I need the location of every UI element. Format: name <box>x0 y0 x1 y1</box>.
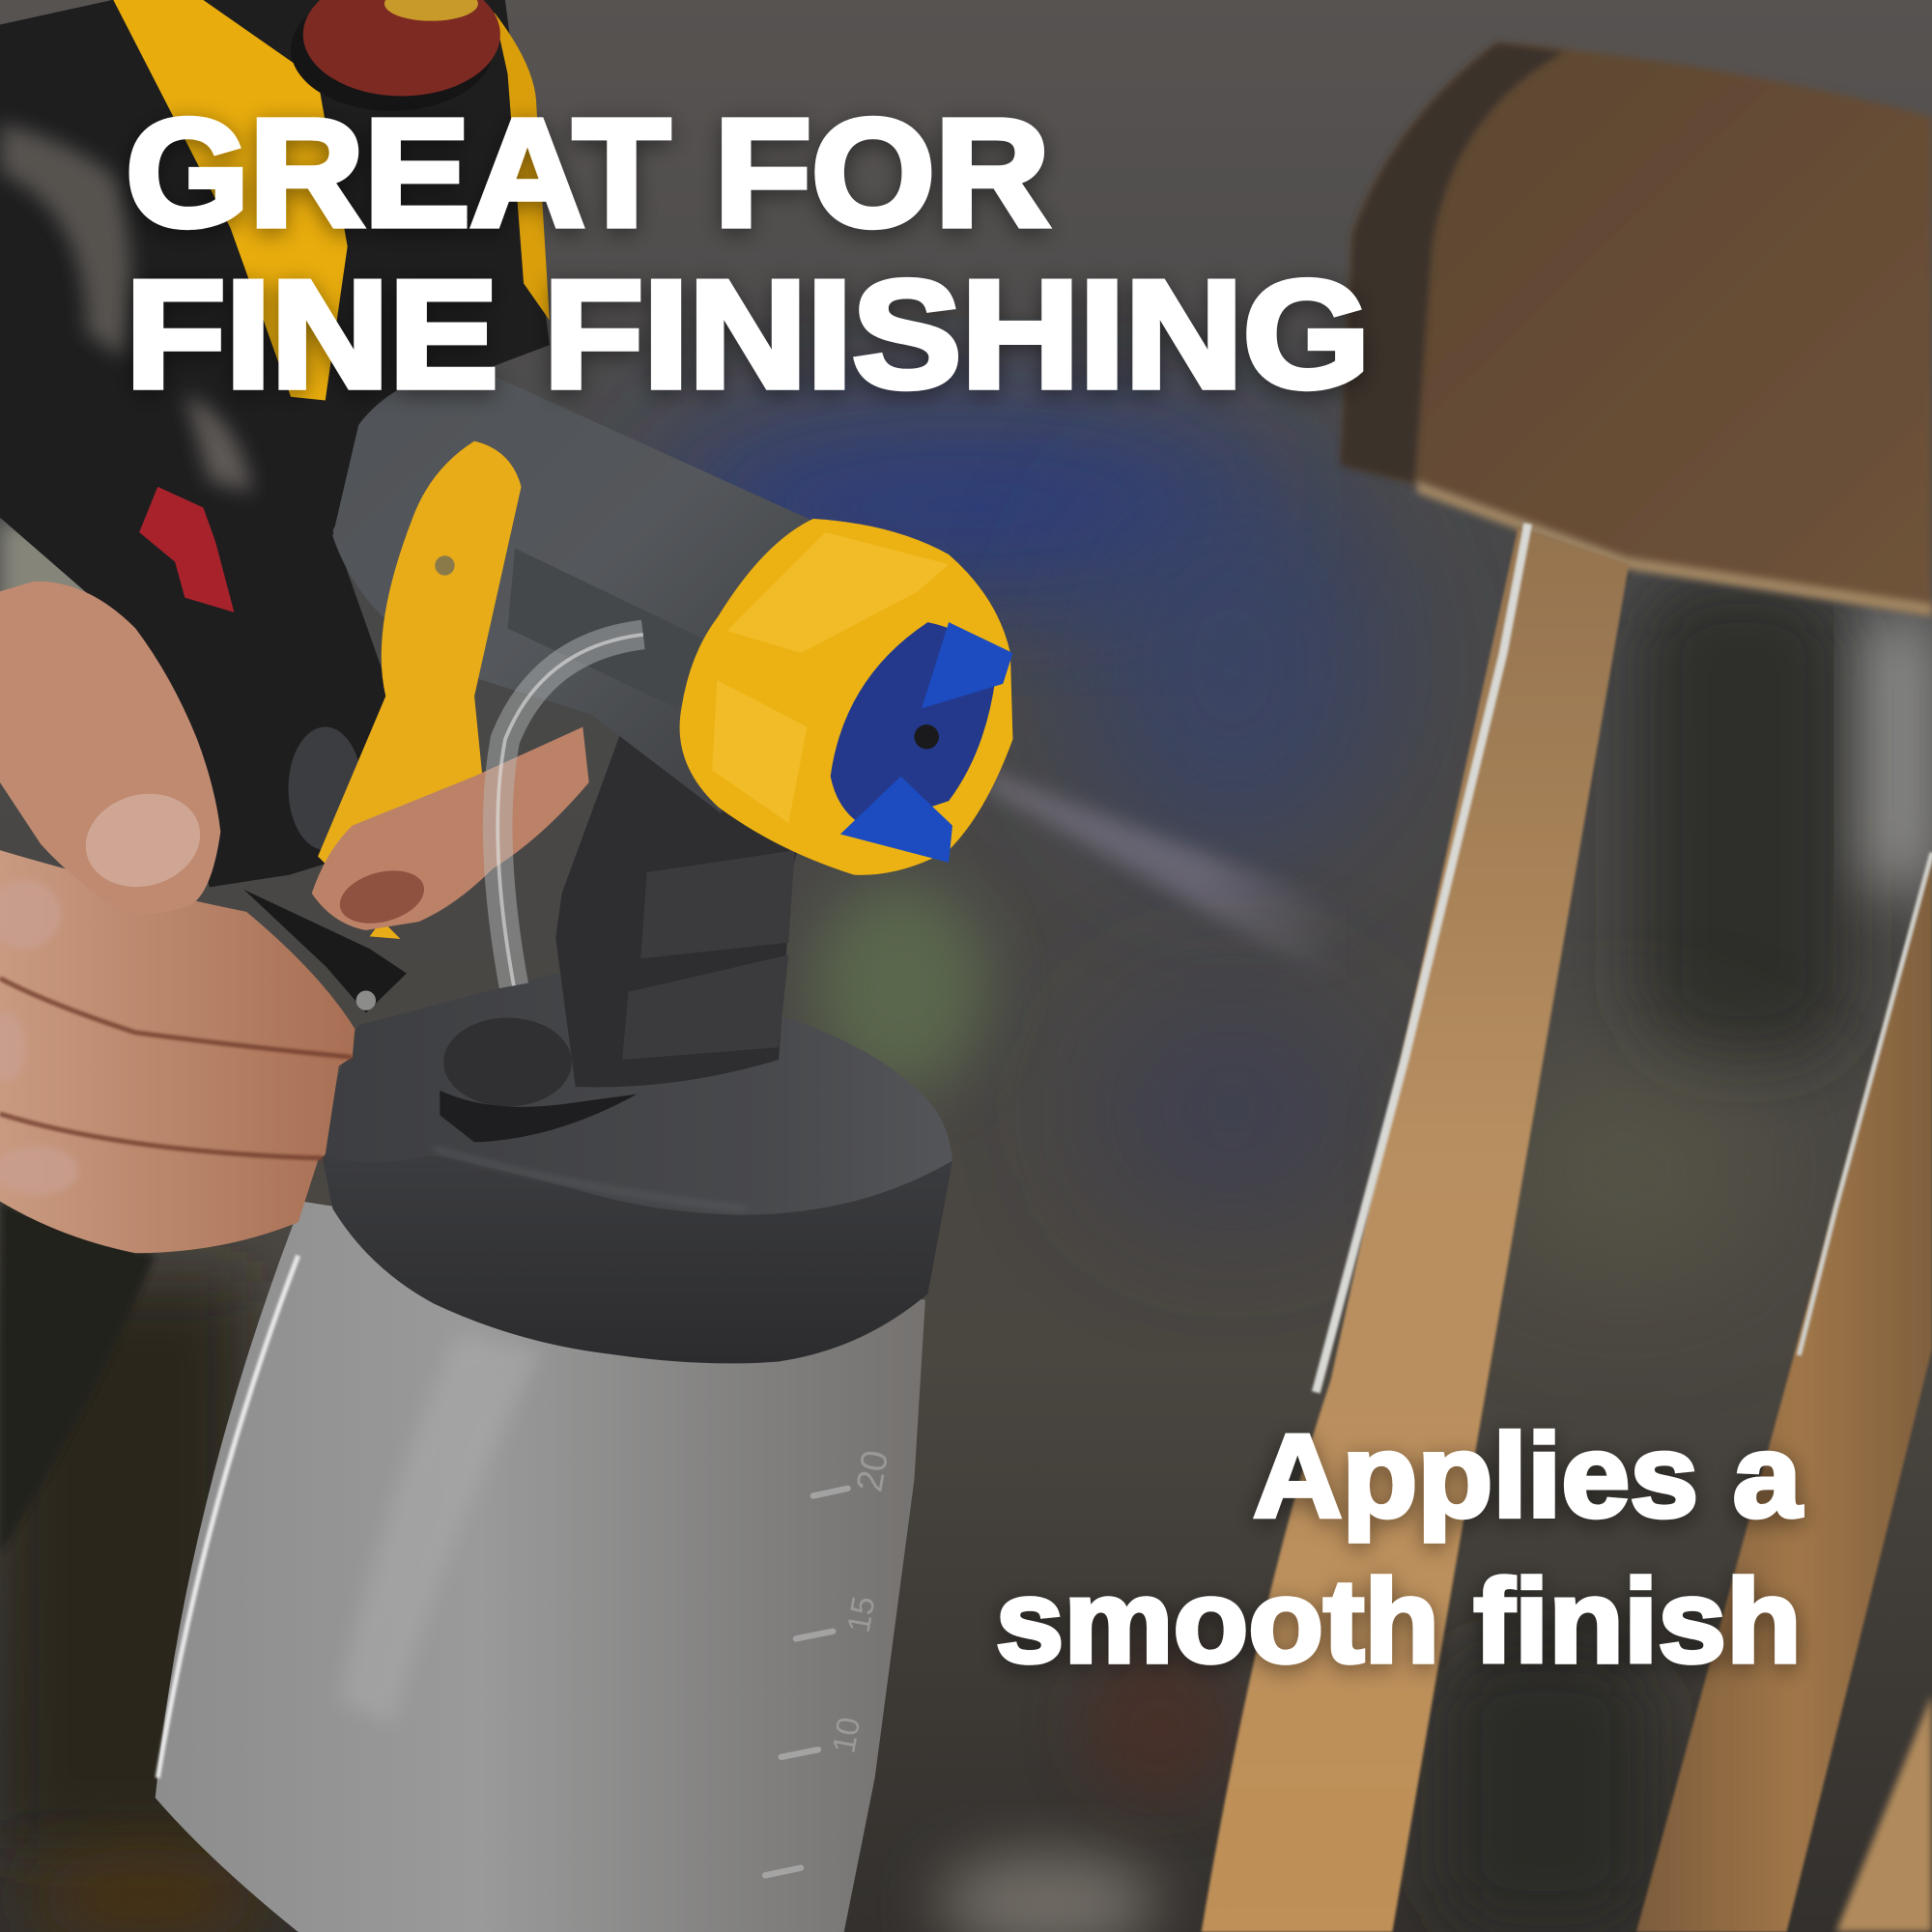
thumb nail <box>75 781 211 899</box>
grip lever <box>244 890 407 1012</box>
yellow strap right <box>494 13 550 321</box>
trigger screw <box>435 555 455 576</box>
nozzle ring grip shading <box>712 532 949 823</box>
chair <box>1202 43 1932 1932</box>
bottle measurement numbers: 20 <box>849 1447 896 1494</box>
yellow strap <box>113 0 348 401</box>
thumb <box>0 582 220 914</box>
fingers base <box>0 850 355 1253</box>
grip screw <box>356 991 376 1010</box>
chair leg left <box>1202 527 1629 1932</box>
neck ribs <box>622 850 795 1060</box>
gun body lower sheen <box>185 394 252 493</box>
chair leg right bright edge <box>1799 853 1932 1355</box>
bottle lid <box>322 974 952 1363</box>
bottle left highlight <box>157 1256 298 1778</box>
title <box>126 87 1370 420</box>
chair leg right <box>1636 850 1932 1932</box>
lid side band <box>322 1154 952 1363</box>
chair back rest dark edge <box>1341 43 1565 483</box>
yellow nozzle ring <box>680 519 1012 875</box>
chair back rest <box>1343 43 1932 613</box>
caption line 2: smooth finish <box>996 1555 1802 1688</box>
barrel panel <box>508 549 702 708</box>
tube connector <box>440 1018 637 1142</box>
top dial <box>291 0 500 111</box>
paint spray mist <box>985 770 1343 985</box>
index finger front <box>312 727 589 930</box>
blue nozzle tip <box>831 622 1012 863</box>
barrel <box>332 367 819 813</box>
bottle body <box>156 1202 925 1932</box>
caption line 1: Applies a <box>1253 1409 1803 1542</box>
chair leg far right <box>1836 1694 1932 1932</box>
lid top surface <box>322 974 952 1215</box>
hand <box>0 582 589 1253</box>
index fingernail <box>334 862 430 932</box>
caption <box>996 1409 1803 1688</box>
bottle measurement numbers <box>826 1447 896 1756</box>
trigger yellow <box>318 441 522 939</box>
grey knob <box>288 727 362 850</box>
red switch <box>139 487 234 612</box>
gun body sheen <box>0 124 131 357</box>
tube inner <box>497 635 643 985</box>
title line 2: FINE FINISHING <box>126 249 1370 420</box>
bottle measurement numbers: 10 <box>826 1715 867 1756</box>
handle below hand <box>0 1202 156 1553</box>
chair back rest lower lip <box>1417 480 1932 616</box>
finger creases <box>0 979 353 1158</box>
gun neck <box>555 708 801 1087</box>
fingernails <box>0 880 79 1195</box>
gun body black <box>0 0 550 887</box>
bottle measurement numbers: 15 <box>841 1594 883 1635</box>
bottle centre sheen <box>339 1337 542 1725</box>
title line 1: GREAT FOR <box>126 87 1050 258</box>
clear tube <box>497 635 643 985</box>
bottle measurement marks <box>765 1489 848 1875</box>
spray gun <box>0 0 1012 1932</box>
lid highlight <box>434 1149 746 1208</box>
chair leg left bright edge <box>1316 524 1528 1392</box>
